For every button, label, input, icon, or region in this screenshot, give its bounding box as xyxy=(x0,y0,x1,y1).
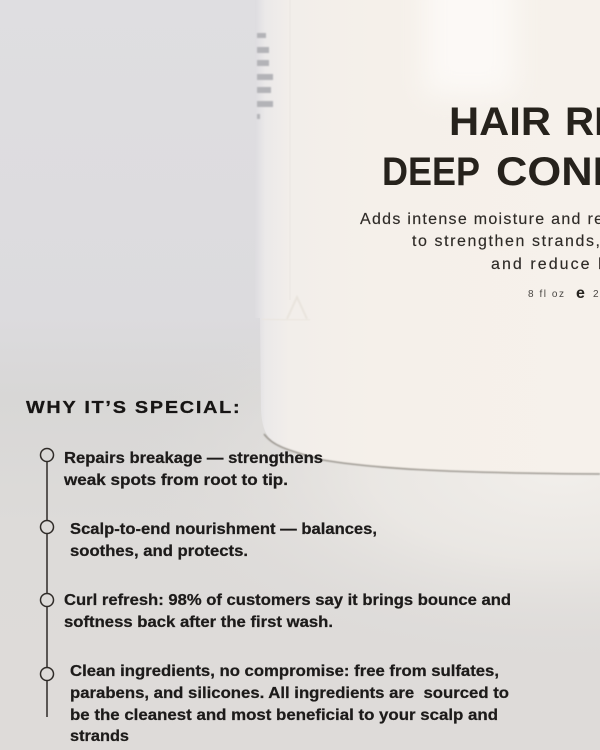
product jar xyxy=(255,0,600,474)
jar label title xyxy=(384,108,600,186)
jar label size: 8 fl oz xyxy=(528,289,564,300)
benefit 1: weak spots from root to tip. xyxy=(63,472,288,489)
jar label size: 2 xyxy=(593,289,599,300)
timeline marker 3 xyxy=(40,594,54,606)
jar fine print xyxy=(257,33,273,119)
benefit 4: Clean ingredients, no compromise: free from sulfates, xyxy=(70,663,499,680)
jar label description: to strengthen strands, xyxy=(412,233,600,250)
timeline marker 4 xyxy=(40,668,54,680)
jar label title: DEEP xyxy=(382,150,480,194)
benefit 4: strands xyxy=(70,728,129,745)
benefit 3: softness back after the first wash. xyxy=(64,614,333,631)
timeline marker 1 xyxy=(40,448,54,462)
jar label size: e xyxy=(576,285,585,302)
jar seam xyxy=(290,0,291,300)
jar label size xyxy=(528,290,598,298)
timeline xyxy=(40,448,54,717)
benefit 1: Repairs breakage — strengthens xyxy=(64,450,323,467)
timeline marker 2 xyxy=(40,520,54,534)
jar body xyxy=(255,0,600,473)
benefit 2 xyxy=(70,521,377,560)
benefit 4 xyxy=(70,663,509,745)
heading: WHY IT’S SPECIAL: xyxy=(26,398,241,418)
jar label title: HAIR xyxy=(449,100,551,144)
benefit 1 xyxy=(63,450,323,489)
jar embossed mark xyxy=(287,297,307,319)
timeline spine xyxy=(46,462,48,717)
benefit 3: Curl refresh: 98% of customers say it brings bounce and xyxy=(64,592,511,609)
benefit 2: soothes, and protects. xyxy=(70,543,248,560)
benefit text list xyxy=(63,450,511,745)
floor highlight xyxy=(100,270,600,670)
jar label description xyxy=(360,211,600,273)
benefit 3 xyxy=(64,592,511,631)
jar highlight xyxy=(431,0,509,89)
benefit 4: parabens, and silicones. All ingredients are sourced to xyxy=(70,685,509,702)
benefit 4: be the cleanest and most beneficial to your scalp and xyxy=(70,707,498,724)
jar base shadow xyxy=(264,434,600,474)
jar lid step xyxy=(268,319,269,320)
benefit 2: Scalp-to-end nourishment — balances, xyxy=(70,521,377,538)
jar label description: Adds intense moisture and re xyxy=(360,211,600,228)
